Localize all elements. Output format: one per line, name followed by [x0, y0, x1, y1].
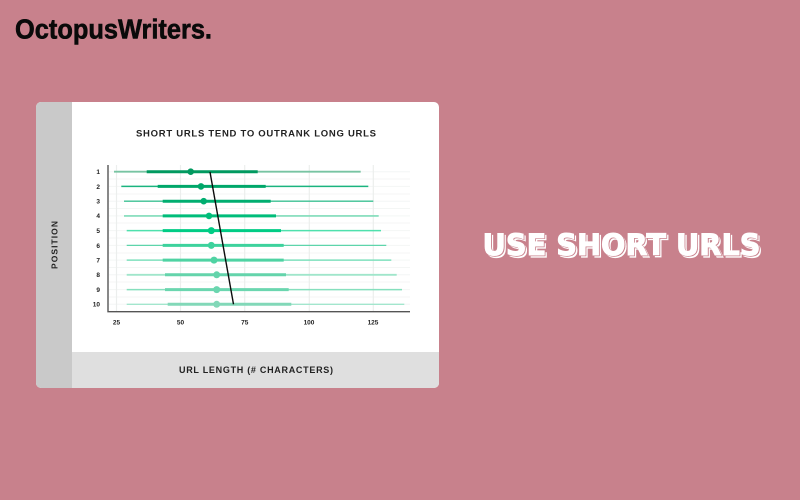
- y-axis position numbers: 3: [96, 198, 100, 206]
- row 10: [127, 301, 404, 308]
- y-axis label: POSITION: [50, 221, 60, 269]
- y-axis position numbers: 8: [96, 272, 100, 279]
- row 1: [114, 168, 361, 175]
- y-axis position numbers: 10: [93, 302, 100, 308]
- y-axis position numbers: 7: [96, 258, 100, 264]
- logo: OctopusWriters: OctopusWriters.: [15, 14, 212, 44]
- axes: [108, 165, 410, 312]
- y-axis side band: [36, 102, 72, 388]
- heading: USE SHORT URLS: USE SHORT URLS: [482, 228, 760, 262]
- x-axis tick labels: 50: [177, 320, 184, 326]
- y-axis position numbers: [93, 169, 100, 308]
- row 7: [127, 257, 391, 264]
- row 9: [127, 286, 402, 293]
- y-axis position numbers: 9: [96, 287, 100, 294]
- x-axis label: URL LENGTH (# CHARACTERS): [179, 365, 333, 375]
- trend line: [210, 172, 234, 304]
- x-axis tick labels: 100: [304, 320, 315, 326]
- x-axis tick labels: 25: [113, 320, 120, 326]
- row 5: [127, 227, 381, 234]
- y-axis position numbers: 4: [96, 213, 100, 220]
- row 6: [127, 242, 386, 249]
- x-axis bottom band: [72, 352, 439, 388]
- row 3: [124, 198, 373, 204]
- x-axis tick labels: 75: [241, 320, 249, 326]
- y-axis position numbers: 6: [96, 243, 100, 250]
- panel: chart card: [36, 102, 439, 388]
- y-axis position numbers: 5: [96, 228, 100, 235]
- heading: USE SHORT URLS: USE SHORT URLS: [484, 230, 762, 264]
- heading: USE SHORT URLS: USE SHORT URLS: [483, 229, 761, 263]
- row 4: [124, 213, 379, 219]
- row 2: [121, 183, 368, 190]
- y-axis position numbers: 2: [96, 184, 100, 191]
- x-axis tick labels: 125: [368, 320, 379, 326]
- y-axis position numbers: 1: [96, 169, 100, 176]
- x-axis tick labels: [113, 320, 379, 326]
- row 8: [127, 271, 397, 278]
- chart title: SHORT URLS TEND TO OUTRANK LONG URLS: [136, 128, 376, 140]
- chart: URL length by position: [93, 165, 410, 326]
